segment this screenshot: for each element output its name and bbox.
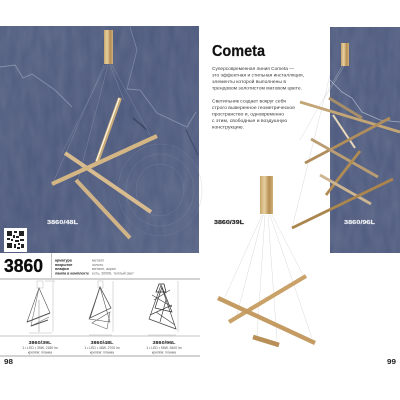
spec labels: плафон	[55, 267, 69, 271]
spec table	[55, 258, 134, 275]
lamp 96L wires	[292, 66, 344, 228]
spec divider lines	[0, 253, 200, 356]
spec values: есть, 3000К, теплый свет	[92, 271, 134, 275]
caption 96L: 1 • LED • 96W, 5400 lm	[146, 346, 182, 350]
spec values: металл	[92, 258, 104, 262]
caption 48L: 3860/48L	[90, 340, 114, 345]
caption 48L: 1 • LED • 48W, 2700 lm	[84, 346, 120, 350]
description text: Светильник создает вокруг себя	[212, 98, 286, 104]
lamp 39L canopy	[260, 176, 273, 214]
lamp 96L	[292, 43, 400, 228]
page number 98: 98	[4, 359, 13, 366]
caption 96L	[146, 340, 182, 354]
description text: с этим, свободные и воздушную	[212, 118, 288, 123]
lamp 39L wires	[225, 215, 312, 340]
description text: пространство и, одновременно	[212, 112, 284, 116]
description text: строго выверенное геометрическое	[212, 105, 295, 110]
description text	[212, 66, 304, 130]
panel: left photo with 3860/48L lamp	[0, 26, 202, 253]
spec values: золото	[92, 263, 103, 267]
caption 39L: крепёж: планка	[28, 350, 52, 354]
panel: right photo with 3860/96L	[330, 27, 400, 253]
lamp 96L bars	[292, 98, 400, 228]
wall cracks texture	[0, 27, 202, 236]
page number 99: 99	[387, 359, 396, 366]
heading Cometa: Cometa	[212, 43, 265, 60]
diagram 48L	[89, 281, 113, 335]
spec values: металл, акрил	[92, 267, 116, 271]
description text: конструкцию.	[212, 124, 244, 130]
QR code	[4, 228, 27, 252]
lamp 48L bars	[52, 98, 157, 238]
caption 39L	[22, 340, 58, 354]
diagram 39L	[27, 281, 55, 333]
spec values	[92, 258, 134, 275]
caption 96L: 3860/96L	[152, 340, 176, 345]
spec labels	[55, 258, 89, 275]
description text: трендовом золотистом матовом цвете.	[212, 86, 302, 90]
caption 48L	[84, 340, 120, 354]
label 3860/48L: 3860/48L	[47, 220, 79, 226]
diagram 96L	[148, 281, 178, 335]
caption 48L: крепёж: планка	[90, 350, 114, 354]
spec labels: покрытие	[55, 263, 72, 267]
caption 39L: 1 • LED • 39W, 2180 lm	[22, 346, 58, 350]
label 3860/96L: 3860/96L	[344, 220, 376, 226]
description text: элементы которой выполнены в	[212, 78, 287, 84]
lamp 39L	[218, 176, 315, 345]
description text: Суперсовременная линия Cometa —	[212, 66, 294, 71]
lamp 39L bars	[229, 276, 306, 322]
description text: это эффектная и стильная инсталляция,	[212, 72, 304, 78]
caption 39L: 3860/39L	[28, 340, 52, 345]
spec labels: лампа в комплекте	[55, 271, 89, 275]
lamp 96L canopy	[341, 43, 349, 66]
spec labels: арматура	[55, 258, 73, 262]
model number 3860: 3860	[4, 256, 43, 276]
lamp 48L suspension wires	[53, 65, 150, 183]
lamp 48L canopy	[104, 30, 113, 64]
label 3860/39L: 3860/39L	[214, 220, 245, 226]
caption 96L: крепёж: планка	[152, 350, 176, 354]
